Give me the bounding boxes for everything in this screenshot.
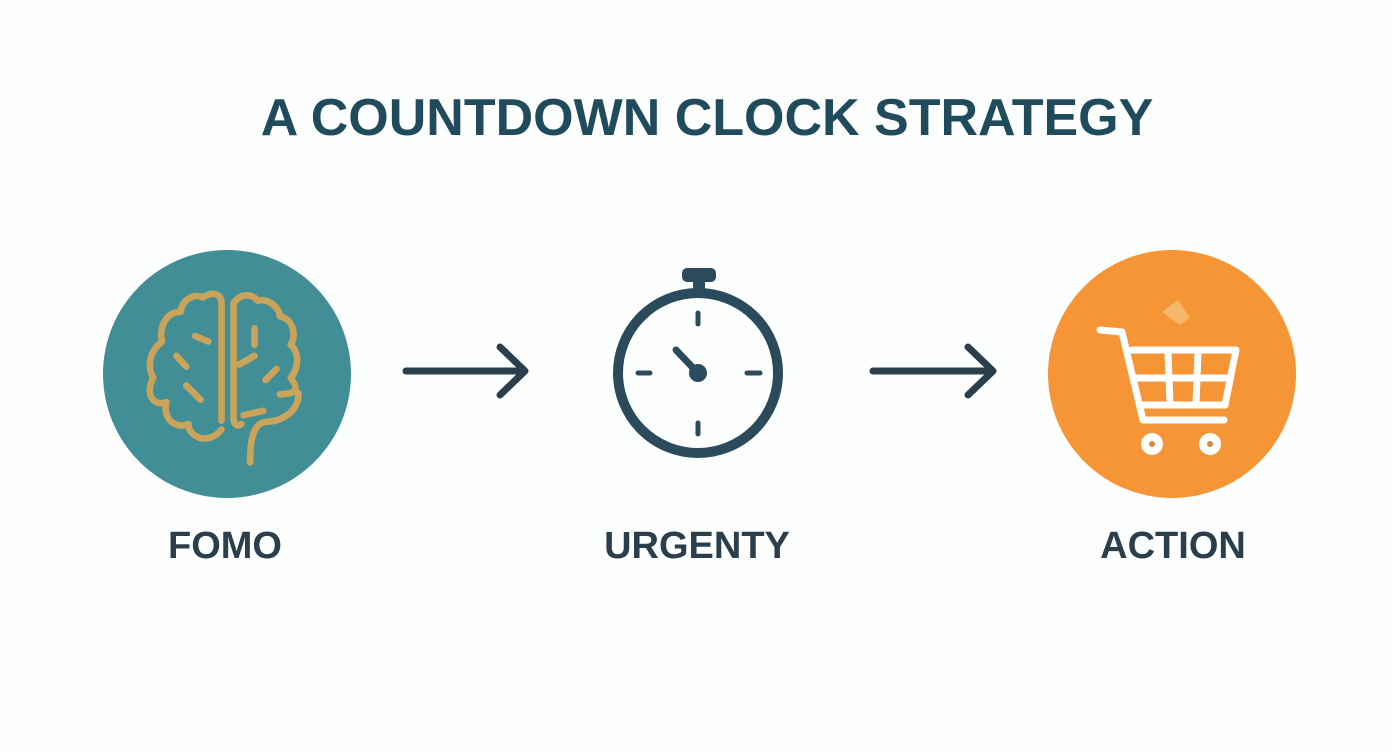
label: URGENTY: URGENTY bbox=[604, 525, 790, 567]
icon: cart circle bbox=[1048, 250, 1296, 498]
icon: brain circle bbox=[103, 250, 351, 498]
arrow 2 bbox=[873, 347, 993, 395]
arrow 1 bbox=[406, 347, 525, 395]
title: A COUNTDOWN CLOCK STRATEGY bbox=[261, 89, 1153, 147]
icon: stopwatch bbox=[618, 268, 778, 453]
label: FOMO: FOMO bbox=[168, 525, 282, 567]
label: ACTION: ACTION bbox=[1100, 525, 1246, 567]
